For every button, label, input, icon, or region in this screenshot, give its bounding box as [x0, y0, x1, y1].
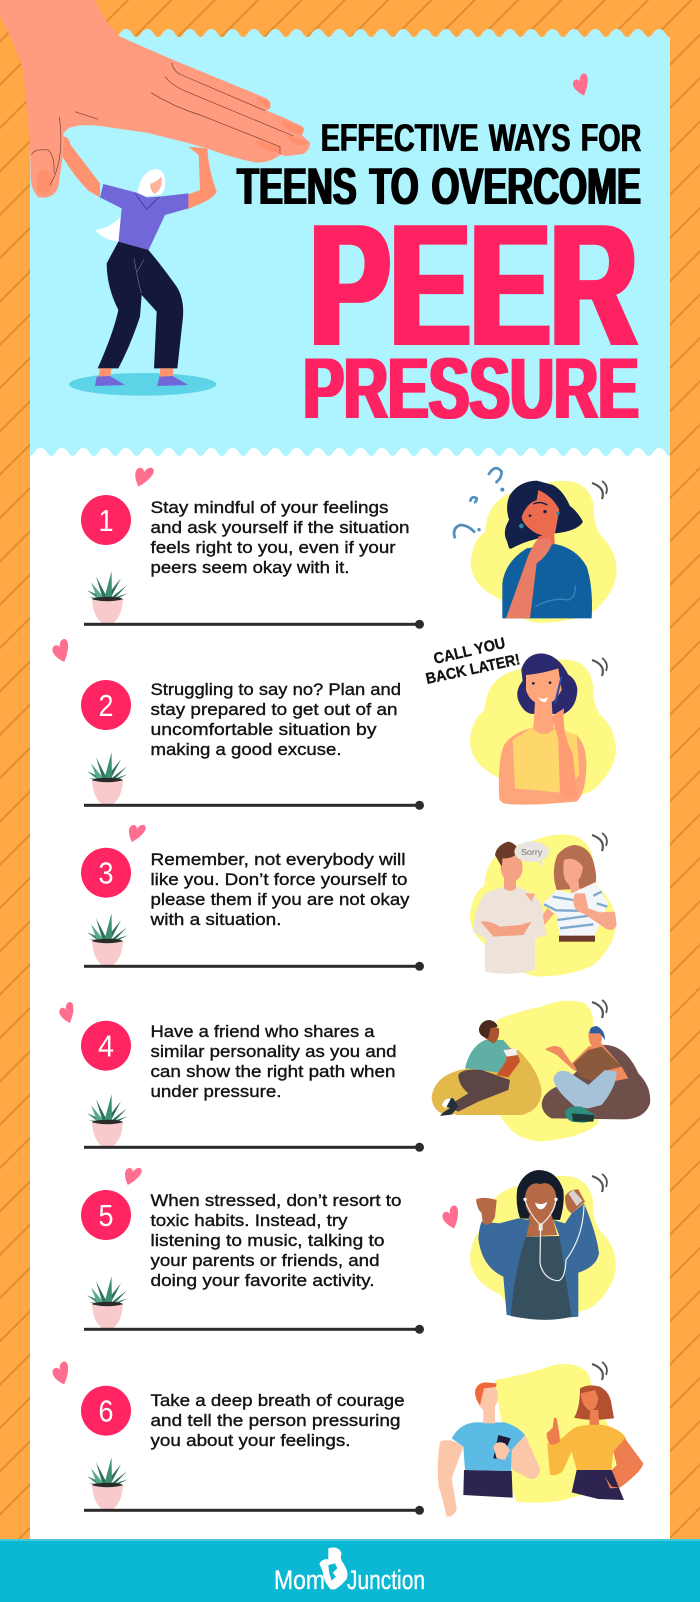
icon: plant [87, 1276, 128, 1328]
illustration: two friends on bean bags [432, 1000, 650, 1142]
text block 2 [150, 680, 401, 759]
illustration: girl listening to music [470, 1170, 616, 1320]
icon: plant [87, 1094, 128, 1146]
text block 5: doing your favorite activity. [150, 1271, 374, 1290]
text block 2: making a good excuse. [150, 740, 342, 759]
number badge 6 [81, 1386, 131, 1436]
text block 4: similar personality as you and [150, 1042, 396, 1061]
text block 6 [150, 1391, 404, 1450]
hand [0, 0, 310, 198]
text block 6: and tell the person pressuring [150, 1411, 400, 1430]
text block 1 [150, 498, 410, 577]
step 3 [81, 819, 617, 976]
text block 6: Take a deep breath of courage [150, 1391, 404, 1410]
icon: heart [52, 1361, 68, 1385]
step 4 [59, 1000, 650, 1152]
text block 5: toxic habits. Instead, try [150, 1211, 348, 1230]
icon: heart beside figure [442, 1205, 458, 1229]
divider [84, 620, 424, 629]
divider [84, 1506, 424, 1515]
number badge 5: 5 [98, 1198, 114, 1233]
number badge 5 [81, 1190, 131, 1240]
text block 4: Have a friend who shares a [150, 1022, 375, 1041]
icon: plant [87, 571, 128, 623]
number badge 3: 3 [98, 856, 114, 891]
text block 3 [149, 850, 410, 929]
text block 5: When stressed, don’t resort to [150, 1191, 402, 1210]
step 1 [81, 461, 617, 629]
text block 4 [150, 1022, 396, 1101]
number badge 2: 2 [98, 688, 114, 723]
callout: Sorry bubble [514, 841, 549, 867]
icon: heart [123, 819, 147, 844]
icon: heart [59, 1002, 73, 1023]
callout: speech text: CALL YOU [432, 635, 507, 668]
callout: Sorry bubble: Sorry [521, 847, 543, 857]
footer bar [0, 1539, 700, 1602]
text block 2: uncomfortable situation by [150, 720, 377, 739]
divider [84, 1325, 424, 1334]
number badge 4 [81, 1021, 131, 1071]
text block 1: Stay mindful of your feelings [150, 498, 388, 517]
illustration: man and woman talking [438, 1362, 643, 1517]
panel: white content area [30, 448, 670, 1540]
woman figure [63, 137, 217, 386]
logo: MomJunction: Junction [347, 1565, 425, 1595]
text block 1: peers seem okay with it. [150, 558, 350, 577]
text block 5: listening to music, talking to [150, 1231, 384, 1250]
callout: speech text: BACK LATER! [424, 651, 522, 688]
number badge 6: 6 [98, 1394, 114, 1429]
divider [84, 801, 424, 810]
text block 5 [150, 1191, 402, 1290]
illustration: girl on phone [424, 635, 616, 805]
number badge 3 [81, 848, 131, 898]
text block 2: stay prepared to get out of an [150, 700, 398, 719]
text block 3: please them if you are not okay [150, 890, 410, 909]
illustration: angry boy and girl [470, 833, 617, 976]
callout: speech text [424, 635, 522, 688]
text block 3: with a situation. [149, 910, 282, 929]
logo: MomJunction: Mom [274, 1565, 325, 1595]
text block 2: Struggling to say no? Plan and [150, 680, 401, 699]
title [237, 117, 641, 437]
icon: heart [129, 461, 156, 489]
logo: MomJunction [274, 1547, 425, 1595]
text block 4: can show the right path when [150, 1062, 396, 1081]
icon: plant [87, 1457, 128, 1509]
icon: plant [87, 752, 128, 804]
panel: header [30, 29, 670, 448]
step 2 [52, 635, 616, 810]
number badge 1 [81, 495, 131, 545]
illustration: thoughtful girl [454, 468, 617, 623]
text block 1: feels right to you, even if your [150, 538, 396, 557]
illustration: hand pressing down on a woman [0, 0, 310, 396]
number badge 2 [81, 680, 131, 730]
text block 3: like you. Don’t force yourself to [150, 870, 408, 889]
divider [84, 1143, 424, 1152]
step 6 [52, 1361, 643, 1517]
number badge 4: 4 [98, 1029, 114, 1064]
text block 1: and ask yourself if the situation [150, 518, 410, 537]
divider [84, 962, 424, 971]
step 5 [81, 1162, 616, 1334]
icon: plant [87, 913, 128, 965]
ground shadow [69, 373, 216, 396]
text block 3: Remember, not everybody will [150, 850, 406, 869]
icon: heart [52, 639, 68, 662]
icon: heart [119, 1162, 143, 1187]
number badge 1: 1 [98, 503, 114, 538]
text block 5: your parents or friends, and [150, 1251, 380, 1270]
icon: heart top [573, 74, 588, 96]
text block 4: under pressure. [150, 1082, 282, 1101]
text block 6: you about your feelings. [150, 1431, 350, 1450]
